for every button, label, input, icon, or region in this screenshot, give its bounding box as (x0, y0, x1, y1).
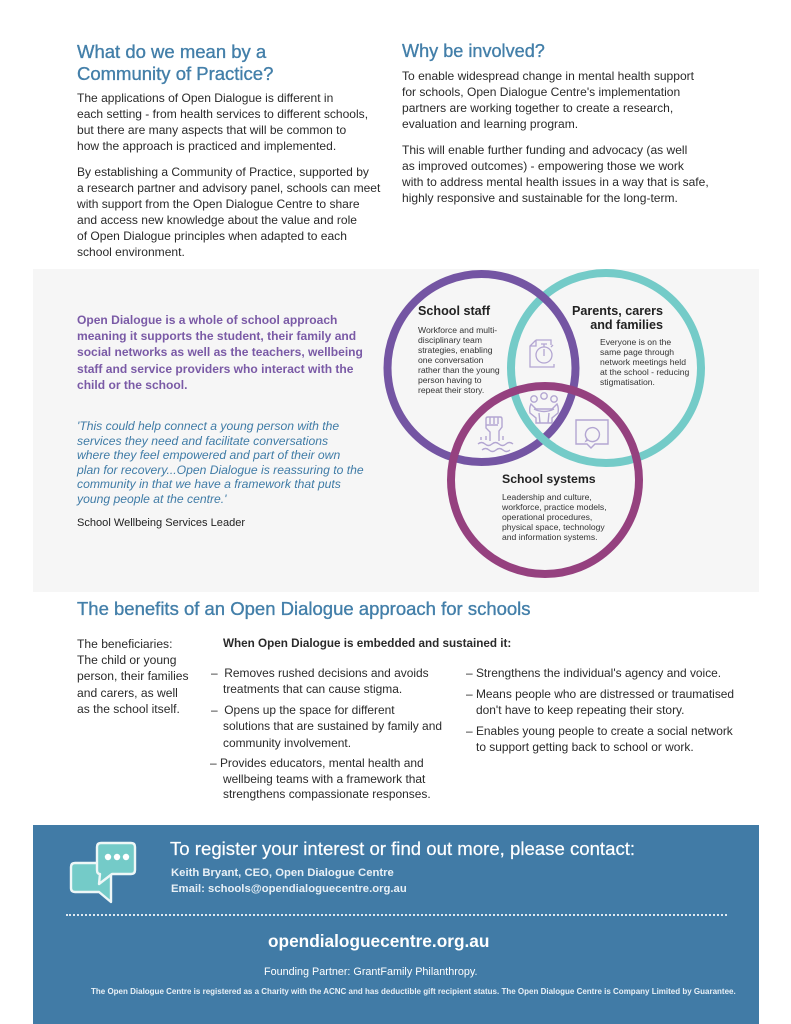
text: legal note: The Open Dialogue Centre is registered as a Charity with the ACNC and has deductible gift recipient status. The Open Dialogue Centre is Company Limited by Guarantee. (91, 987, 736, 996)
label: school staff: School staff (418, 304, 490, 318)
text: beneficiaries: person, their families (77, 669, 189, 683)
benefit: framework for educators (210, 756, 431, 801)
list: benefits left column (210, 666, 442, 801)
text: school systems description: Leadership and culture, (502, 492, 592, 502)
list: benefits right column (466, 666, 734, 754)
text: beneficiaries: and carers, as well (77, 686, 178, 700)
text: community of practice intro: how the approach is practiced and implemented. (77, 139, 336, 153)
text: quote attribution: School Wellbeing Services Leader (77, 517, 245, 529)
text: school systems description: operational procedures, (502, 512, 592, 522)
icon: group meeting (530, 393, 558, 423)
text: why be involved intro: partners are working together to create a research, (402, 101, 673, 115)
text: school systems description: physical space, technology (502, 522, 605, 532)
benefit: removes rushed decisions: treatments that can cause stigma. (223, 682, 402, 696)
benefit: framework for educators: wellbeing teams with a framework that (223, 772, 425, 786)
benefit: opens up space: community involvement. (223, 736, 351, 750)
benefit: framework for educators: strengthens compassionate responses. (223, 787, 431, 801)
text: founding partner: Founding Partner: GrantFamily Philanthropy. (264, 966, 477, 978)
benefit: not repeating story: – Means people who are distressed or traumatised (466, 687, 734, 701)
text: parents description (600, 337, 689, 387)
heading: register interest: To register your interest or find out more, please contact: (170, 838, 635, 859)
text: community of practice detail: of Open Dialogue principles when adapted to each (77, 229, 347, 243)
text: parents description: stigmatisation. (600, 377, 655, 387)
text: purple statement (77, 313, 363, 392)
text: beneficiaries (77, 637, 189, 716)
text: school staff description: one conversation (418, 355, 483, 365)
text: beneficiaries: as the school itself. (77, 702, 180, 716)
text: why be involved detail: This will enable further funding and advocacy (as well (402, 143, 687, 157)
text: why be involved detail: as improved outcomes) - empowering those we work (402, 159, 684, 173)
text: school staff description: person having to (418, 375, 482, 385)
panel: whole of school approach (33, 269, 759, 592)
text: school systems description (502, 492, 607, 542)
benefit: opens up space (211, 703, 442, 750)
text: community of practice detail: with support from the Open Dialogue Centre to share (77, 197, 360, 211)
text: quote: community in that we have a framework that puts (77, 477, 341, 491)
benefit: not repeating story: don't have to keep repeating their story. (476, 703, 684, 717)
icon: speech bubble (576, 420, 608, 448)
label: parents, carers and families: Parents, carers (572, 304, 663, 318)
text: beneficiaries: The beneficiaries: (77, 637, 172, 651)
heading: why be involved: Why be involved? (402, 41, 545, 61)
benefit: support network: to support getting back to school or work. (476, 740, 694, 754)
icon: document timer (530, 340, 554, 367)
text: school staff description: Workforce and multi- (418, 325, 497, 335)
text: community of practice intro: but there are many aspects that will be common to (77, 123, 346, 137)
label: school systems: School systems (502, 472, 596, 486)
text: contact details: Keith Bryant, CEO, Open Dialogue Centre (171, 867, 394, 879)
text: school staff description: repeat their story. (418, 385, 484, 395)
text: quote: young people at the centre.' (77, 492, 226, 506)
text: purple statement: Open Dialogue is a whole of school approach (77, 313, 337, 327)
label: parents, carers and families (572, 304, 663, 332)
text: community of practice detail: school environment. (77, 245, 185, 259)
benefit: removes rushed decisions: – Removes rushed decisions and avoids (211, 666, 429, 680)
text: community of practice detail: By establishing a Community of Practice, supported by (77, 165, 369, 179)
circle: school staff (388, 274, 576, 462)
text: why be involved detail: highly responsive and sustainable for the long-term. (402, 191, 678, 205)
text: quote (76, 419, 364, 506)
text: contact details (171, 867, 407, 895)
benefit: opens up space: solutions that are sustained by family and (223, 719, 442, 733)
benefit: not repeating story (466, 687, 734, 717)
heading: community of practice: Community of Practice? (77, 62, 273, 84)
text: community of practice detail: a research partner and advisory panel, schools can meet (77, 181, 380, 195)
text: school staff description: strategies, enabling (418, 345, 493, 355)
text: why be involved intro (402, 69, 694, 131)
text: quote: 'This could help connect a young person with the (77, 419, 339, 433)
text: contact details: Email: schools@opendialoguecentre.org.au (171, 883, 407, 895)
text: why be involved intro: evaluation and learning program. (402, 117, 578, 131)
panel: contact footer (33, 825, 759, 1024)
heading: benefits: The benefits of an Open Dialogue approach for schools (77, 598, 531, 619)
text: purple statement: social networks as well as the teachers, wellbeing (77, 345, 363, 359)
text: benefits lead-in: When Open Dialogue is embedded and sustained it: (223, 637, 511, 650)
text: quote: plan for recovery...Open Dialogue is reassuring to the (77, 462, 364, 476)
benefit: agency and voice: – Strengthens the individual's agency and voice. (466, 666, 721, 680)
benefit: support network (466, 724, 733, 754)
text: school staff description: rather than the young (418, 365, 500, 375)
benefit: removes rushed decisions (211, 666, 429, 696)
circle: school systems (451, 386, 639, 574)
text: school systems description: workforce, practice models, (502, 502, 607, 512)
benefit: opens up space: – Opens up the space for different (211, 703, 395, 717)
text: community of practice intro: each setting - from health services to different schools, (77, 107, 368, 121)
heading: community of practice (76, 41, 273, 84)
chart: venn diagram (384, 269, 705, 578)
text: community of practice intro (77, 91, 368, 153)
benefit: framework for educators: – Provides educators, mental health and (210, 756, 424, 770)
text: parents description: network meetings held (600, 357, 686, 367)
text: school staff description: disciplinary team (418, 335, 482, 345)
text: parents description: Everyone is on the (600, 337, 671, 347)
text: school systems description: and information systems. (502, 532, 598, 542)
text: community of practice intro: The applications of Open Dialogue is different in (77, 91, 333, 105)
heading: community of practice: What do we mean by a (77, 41, 266, 62)
text: community of practice detail: and access new knowledge about the value and role (77, 213, 357, 227)
text: quote: services they need and facilitate conversations (77, 434, 328, 448)
text: quote: where they feel empowered and part of their own (77, 448, 340, 462)
label: parents, carers and families: and families (590, 318, 663, 332)
icon: speech bubbles (70, 842, 136, 904)
text: community of practice detail (77, 165, 380, 259)
text: why be involved intro: To enable widespread change in mental health support (402, 69, 694, 83)
text: website: opendialoguecentre.org.au (268, 931, 489, 951)
text: beneficiaries: The child or young (77, 653, 176, 667)
text: why be involved intro: for schools, Open Dialogue Centre's implementation (402, 85, 680, 99)
text: parents description: same page through (600, 347, 674, 357)
text: why be involved detail: with to address mental health issues in a way that is safe, (402, 175, 709, 189)
text: purple statement: child or the school. (77, 378, 187, 392)
text: parents description: at the school - reducing (600, 367, 689, 377)
circle: parents (511, 273, 701, 463)
benefit: support network: – Enables young people to create a social network (466, 724, 733, 738)
text: why be involved detail (402, 143, 709, 205)
text: purple statement: meaning it supports the student, their family and (77, 329, 356, 343)
icon: raised fist (478, 417, 513, 452)
text: purple statement: staff and service providers who interact with the (77, 362, 353, 376)
text: school staff description (418, 325, 500, 395)
